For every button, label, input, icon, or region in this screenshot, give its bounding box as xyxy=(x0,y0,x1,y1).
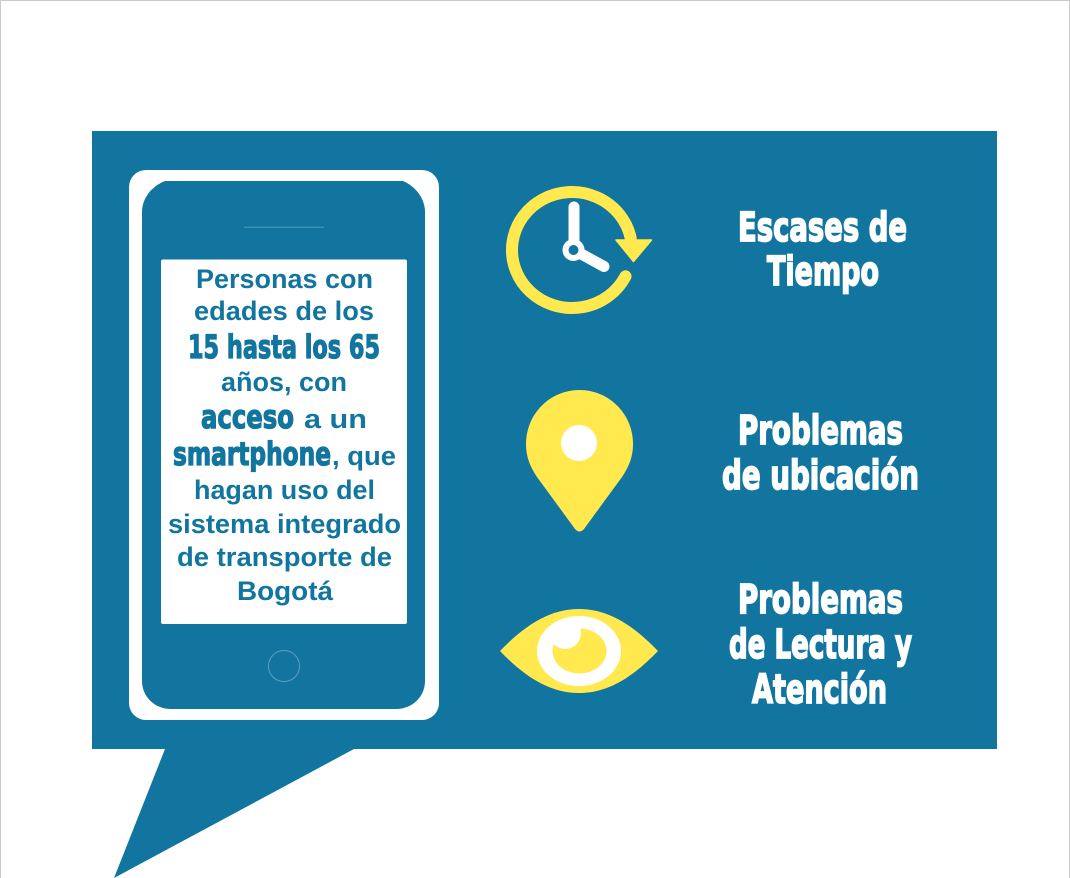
label: Problemas de ubicación xyxy=(722,408,919,499)
label: Problemas de Lectura y Atención: de Lectura y xyxy=(729,622,912,668)
text block: target audience on phone screen: sistema integrado xyxy=(168,509,401,539)
text block: target audience on phone screen: de transporte de xyxy=(177,542,392,572)
text block: target audience on phone screen: 15 hasta los 65 xyxy=(188,328,380,366)
label: Problemas de Lectura y Atención: Problemas xyxy=(738,577,903,623)
label: Escases de Tiempo: Tiempo xyxy=(767,249,879,295)
text block: target audience on phone screen: edades de los xyxy=(194,296,374,326)
text block: target audience on phone screen: años, con xyxy=(221,367,347,397)
text block: target audience on phone screen: smartphone xyxy=(173,435,331,473)
icon: clock with circular arrow xyxy=(512,192,652,308)
text block: target audience on phone screen: acceso xyxy=(201,398,294,436)
text block: target audience on phone screen: hagan uso del xyxy=(194,475,375,505)
label: Problemas de ubicación: de ubicación xyxy=(722,453,919,499)
text block: target audience on phone screen: Personas con xyxy=(196,264,373,294)
label: Problemas de Lectura y Atención xyxy=(729,577,912,713)
panel: speech bubble xyxy=(92,131,997,878)
text block: target audience on phone screen xyxy=(161,260,407,624)
label: Problemas de ubicación: Problemas xyxy=(738,408,903,454)
label: Escases de Tiempo xyxy=(738,205,907,295)
label: Escases de Tiempo: Escases de xyxy=(738,205,907,251)
text block: target audience on phone screen: a un xyxy=(304,404,367,434)
icon: smartphone xyxy=(129,170,439,720)
icon: location pin xyxy=(526,390,633,532)
icon: eye xyxy=(500,609,658,693)
text block: target audience on phone screen: Bogotá xyxy=(237,576,334,606)
label: Problemas de Lectura y Atención: Atención xyxy=(752,667,887,713)
text block: target audience on phone screen: , que xyxy=(332,441,396,471)
